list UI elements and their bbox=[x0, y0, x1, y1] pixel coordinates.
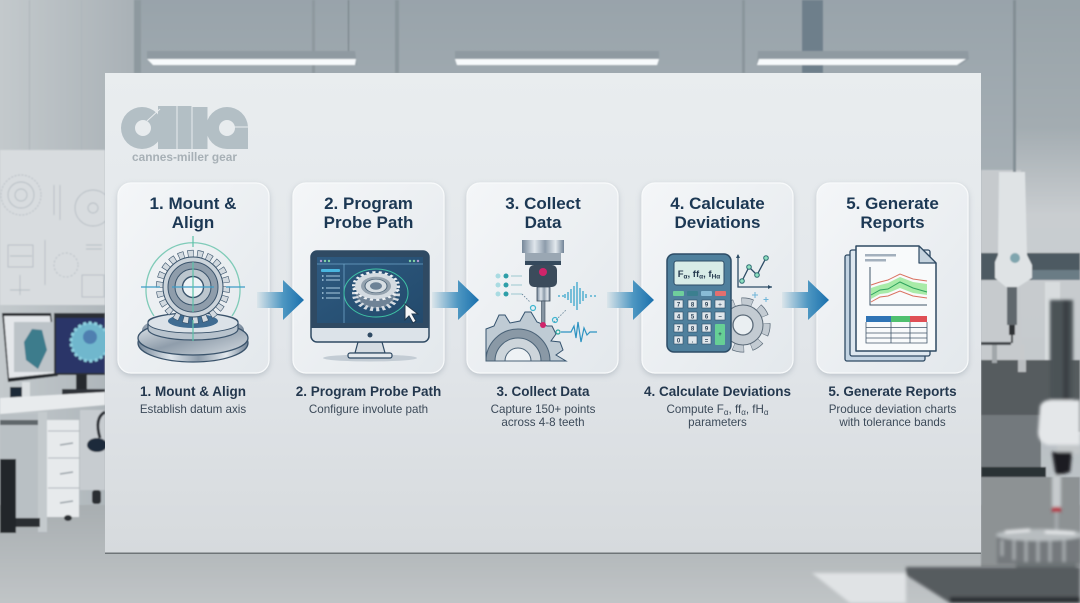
card panel bbox=[118, 183, 269, 373]
step 2 card bbox=[293, 183, 444, 416]
arrow 2 bbox=[432, 280, 479, 320]
step description: Produce deviation charts bbox=[829, 403, 957, 416]
arrow 1 bbox=[257, 280, 304, 320]
step description: , fH bbox=[746, 403, 764, 416]
step description: with tolerance bands bbox=[838, 416, 946, 429]
step 3 card bbox=[467, 183, 618, 429]
CMM machine bbox=[981, 172, 1080, 567]
icon: calculator, gear and chart: 4 bbox=[677, 314, 681, 320]
step caption: 5. Generate Reports bbox=[828, 384, 957, 399]
card heading: 2. Program bbox=[324, 194, 413, 213]
icon: calculator, gear and chart: = bbox=[705, 338, 709, 344]
step description: α bbox=[741, 408, 746, 417]
icon: calculator, gear and chart: α bbox=[684, 274, 688, 280]
icon: calculator, gear and chart: , ff bbox=[688, 269, 700, 280]
icon: monitor with gear bbox=[311, 251, 429, 362]
monitors on desk bbox=[2, 313, 109, 406]
card heading: Data bbox=[525, 213, 562, 232]
icon: calculator, gear and chart: + bbox=[718, 332, 722, 338]
arrow 3 bbox=[607, 280, 654, 320]
step description: Configure involute path bbox=[309, 403, 428, 416]
step description: Capture 150+ points bbox=[491, 403, 596, 416]
card heading: Reports bbox=[860, 213, 925, 232]
step 4 card bbox=[642, 183, 793, 429]
icon: calculator, gear and chart: 0 bbox=[677, 338, 681, 344]
card heading: 1. Mount & bbox=[150, 194, 236, 213]
card panel bbox=[467, 183, 618, 373]
icon: report pages with chart and table bbox=[845, 246, 936, 361]
main panel bbox=[105, 73, 981, 554]
card heading: 3. Collect bbox=[505, 194, 581, 213]
icon: calculator, gear and chart: α bbox=[699, 274, 703, 280]
icon: calculator, gear and chart: 9 bbox=[705, 302, 709, 308]
step description: , ff bbox=[728, 403, 742, 416]
step caption: 1. Mount & Align bbox=[140, 384, 246, 399]
foreground stylus and gear bbox=[812, 300, 1080, 603]
step description: Compute F bbox=[667, 403, 769, 417]
ceiling lights bbox=[147, 51, 969, 65]
card heading: Deviations bbox=[675, 213, 760, 232]
icon: calculator, gear and chart: , f bbox=[703, 269, 712, 280]
step description: parameters bbox=[688, 416, 747, 429]
card heading: 4. Calculate bbox=[670, 194, 765, 213]
logo: cannes-miller gear bbox=[121, 106, 248, 164]
icon: calculator, gear and chart: 7 bbox=[677, 326, 681, 332]
icon: calculator, gear and chart: 7 bbox=[677, 302, 681, 308]
card panel bbox=[642, 183, 793, 373]
icon: calculator, gear and chart: 8 bbox=[691, 302, 695, 308]
icon: calculator, gear and chart: 5 bbox=[691, 314, 695, 320]
card heading: Align bbox=[172, 213, 214, 232]
icon: touch probe on gear bbox=[486, 240, 597, 361]
floor bbox=[0, 505, 1080, 603]
logo mark bbox=[121, 106, 248, 149]
step description: α bbox=[724, 408, 729, 417]
icon: calculator, gear and chart: − bbox=[718, 314, 722, 320]
whiteboard with drawings bbox=[0, 150, 111, 305]
step caption: 3. Collect Data bbox=[496, 384, 590, 399]
logo wordmark: cannes-miller gear bbox=[132, 150, 237, 164]
desk and drawers bbox=[0, 392, 107, 533]
icon: calculator, gear and chart bbox=[667, 254, 772, 352]
step description: across 4-8 teeth bbox=[501, 416, 585, 429]
icon: calculator, gear and chart: Hα bbox=[712, 274, 720, 280]
step description: Establish datum axis bbox=[140, 403, 246, 416]
arrow 4 bbox=[782, 280, 829, 320]
step 5 card bbox=[817, 183, 968, 429]
card heading: 5. Generate bbox=[846, 194, 939, 213]
icon: gear on fixture bbox=[138, 236, 248, 362]
icon: calculator, gear and chart: 9 bbox=[705, 326, 709, 332]
card panel bbox=[293, 183, 444, 373]
icon: calculator, gear and chart: . bbox=[692, 338, 694, 344]
step caption: 2. Program Probe Path bbox=[296, 384, 441, 399]
card heading: Probe Path bbox=[324, 213, 413, 232]
icon: calculator, gear and chart: F bbox=[678, 269, 684, 280]
step caption: 4. Calculate Deviations bbox=[644, 384, 791, 399]
icon: calculator, gear and chart: 8 bbox=[691, 326, 695, 332]
step 1 card bbox=[118, 183, 269, 416]
step description: α bbox=[764, 408, 769, 417]
icon: calculator, gear and chart: ÷ bbox=[718, 302, 722, 308]
card panel bbox=[817, 183, 968, 373]
icon: calculator, gear and chart: 6 bbox=[705, 314, 709, 320]
